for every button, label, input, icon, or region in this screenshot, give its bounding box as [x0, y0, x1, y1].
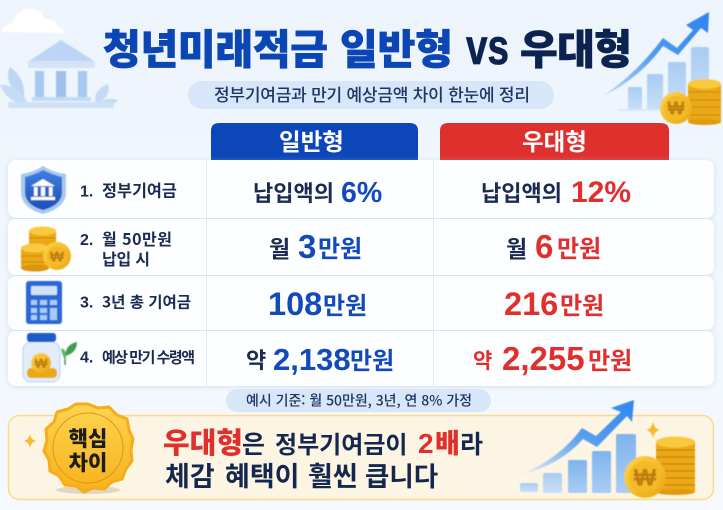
label: 정부기여금: [102, 178, 177, 202]
label: 1.: [80, 184, 93, 200]
value: 일반형 108만원: 108: [268, 286, 322, 322]
badge: 핵심 차이: 핵심: [69, 423, 107, 453]
value: 우대형 2,255만원: 만원: [588, 341, 632, 376]
label: 3.: [80, 294, 93, 312]
key difference panel: [8, 400, 714, 500]
comparison table: [8, 160, 714, 386]
value: 일반형 2,138만원: 2,138: [273, 342, 351, 377]
icon: left leaves: [0, 67, 28, 104]
value: 일반형 6%: 납입액의: [253, 176, 334, 208]
icon: coin jar with sprout: [23, 333, 77, 382]
title: 일반형: [340, 16, 453, 76]
row background cards: [8, 160, 714, 386]
value: 우대형 6만원: 월: [506, 230, 527, 264]
row 1: 정부기여금: [21, 166, 631, 214]
column header: 일반형: [211, 123, 418, 160]
title: [103, 16, 632, 76]
subtitle pill: 정부기여금과 만기 예상금액 차이 한눈에 정리: [214, 81, 530, 106]
value: 일반형 108만원: 만원: [323, 286, 367, 321]
value: 일반형 2,138만원: 만원: [350, 341, 394, 376]
row 2: 월 50만원 납입 시: [21, 226, 601, 272]
icon: rising chart with coins, top right: [603, 12, 721, 125]
coin stack: [688, 79, 721, 125]
label: 2.: [80, 232, 93, 249]
value: 우대형 6만원: 만원: [557, 229, 601, 264]
column header: 일반형: 일반형: [279, 123, 344, 157]
key message text: 정부기여금이: [275, 425, 407, 460]
title: 우대형: [520, 16, 632, 76]
value: 우대형 2,255만원: [473, 340, 632, 377]
title: 청년미래적금: [103, 16, 328, 76]
key message text: 배: [435, 422, 460, 461]
value: 우대형 216만원: 만원: [560, 286, 604, 321]
value: 우대형 216만원: 216: [504, 286, 558, 322]
rising arrow: [522, 400, 634, 474]
badge: 핵심 차이: 차이: [69, 447, 107, 477]
won coin: [624, 456, 666, 498]
value: 우대형 2,255만원: 약: [473, 345, 492, 375]
label: 월 50만원: [102, 226, 172, 250]
icon: rising chart with coins, bottom right: [520, 400, 695, 498]
key message text: 혜택이: [225, 455, 300, 494]
example basis note pill: 예시 기준: 월 50만원, 3년, 연 8% 가정: [246, 390, 472, 410]
icon: sparkle: [24, 434, 36, 448]
label: 예상 만기 수령액: [102, 346, 195, 368]
key message text: [163, 420, 483, 494]
icon: coin stacks: ₩: [50, 248, 65, 266]
icon: bank building: [8, 40, 114, 108]
icon: calculator: [26, 281, 62, 324]
coin stack: [656, 436, 695, 495]
label: 납입 시: [102, 246, 150, 270]
key message text: 2: [418, 428, 434, 459]
rising arrow: [603, 12, 709, 96]
icon: coin stacks: [21, 226, 71, 272]
value: 우대형 6만원: 6: [535, 228, 553, 265]
icon: cloud: [1, 9, 65, 33]
value: 일반형 108만원: [268, 286, 367, 322]
key message text: 우대형: [163, 420, 243, 462]
value: 우대형 12%: 12%: [571, 176, 631, 209]
value: 일반형 2,138만원: 약: [246, 343, 266, 375]
value: 우대형 6만원: [506, 228, 601, 265]
icon: bank illustration with cloud: [0, 9, 118, 108]
column header: 우대형: [440, 123, 669, 160]
chart bars: [520, 434, 636, 493]
title: vs: [466, 19, 509, 75]
icon: shield with bank: [21, 166, 66, 214]
row 3: 3년 총 기여금: [26, 281, 604, 324]
key message text: 훨씬: [308, 455, 358, 494]
key message text: 큽니다: [365, 455, 438, 494]
key message text: 라: [460, 425, 483, 461]
label: [80, 226, 172, 270]
icon: coin jar with sprout: ₩: [34, 355, 48, 371]
badge: 핵심 차이: [44, 404, 133, 494]
value: 일반형 6%: [253, 176, 382, 209]
value: 일반형 3만원: [269, 228, 362, 265]
value: 일반형 3만원: 월: [269, 230, 290, 264]
sparkle: [646, 421, 660, 439]
column header: 우대형: 우대형: [522, 123, 587, 157]
label: 4.: [80, 350, 93, 366]
chart bars: [618, 47, 709, 111]
value: 일반형 6%: 6%: [341, 177, 382, 209]
label: 3년 총 기여금: [102, 290, 191, 312]
value: 일반형 2,138만원: [246, 341, 394, 377]
value: 우대형 12%: 납입액의: [481, 176, 562, 208]
value: 우대형 216만원: [504, 286, 604, 322]
value: 우대형 2,255만원: 2,255: [502, 340, 585, 377]
key message text: 체감: [165, 455, 215, 494]
won coin: ₩: [634, 464, 657, 492]
key message text: 은: [242, 425, 265, 461]
row 4: 예상 만기 수령액: [23, 333, 632, 382]
icon: right leaves: [95, 84, 118, 107]
won coin: ₩: [668, 98, 684, 118]
value: 일반형 3만원: 3: [298, 228, 316, 265]
value: 일반형 3만원: 만원: [318, 229, 362, 264]
value: 우대형 12%: [481, 176, 631, 209]
